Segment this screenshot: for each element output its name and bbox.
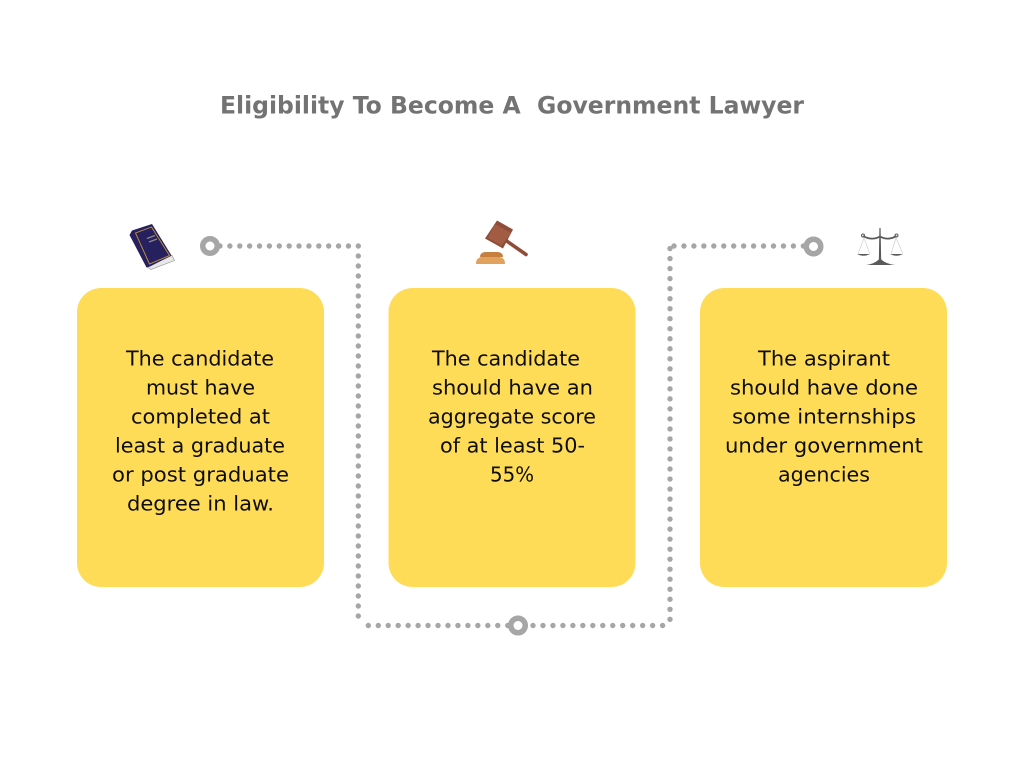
card text: internship requirement <box>725 346 923 486</box>
card text: degree requirement: least a graduate <box>115 434 285 458</box>
icon: scales of justice <box>857 228 903 265</box>
card text: internship requirement: under government <box>725 434 923 458</box>
card text: internship requirement: The aspirant <box>757 346 890 370</box>
card text: score requirement: of at least 50- <box>440 434 585 458</box>
card text: internship requirement: some internships <box>732 404 916 428</box>
panel: aggregate score <box>388 288 636 587</box>
card text: score requirement: 55% <box>490 462 534 486</box>
icon: gavel <box>476 220 526 264</box>
card text: degree requirement: must have <box>146 376 255 400</box>
panel: internships <box>700 288 947 587</box>
card text: degree requirement: The candidate <box>125 346 274 370</box>
card text: internship requirement: agencies <box>778 462 870 486</box>
dotted connector path <box>220 246 804 626</box>
panel: graduate degree <box>77 288 324 587</box>
card text: degree requirement: degree in law. <box>127 492 274 516</box>
ring marker: bottom <box>511 618 525 633</box>
title: Eligibility To Become A Government Lawyer <box>220 92 804 120</box>
ring marker: left <box>203 239 217 253</box>
card text: degree requirement: or post graduate <box>112 462 289 486</box>
card text: score requirement: The candidate <box>431 346 580 370</box>
ring marker: right <box>806 239 821 254</box>
icon: law book <box>130 224 174 270</box>
card text: score requirement: aggregate score <box>428 404 596 428</box>
card text: score requirement: should have an <box>432 376 593 400</box>
card text: score requirement <box>428 346 596 486</box>
card text: degree requirement <box>112 346 289 516</box>
card text: internship requirement: should have done <box>730 376 918 400</box>
card text: degree requirement: completed at <box>131 404 270 428</box>
